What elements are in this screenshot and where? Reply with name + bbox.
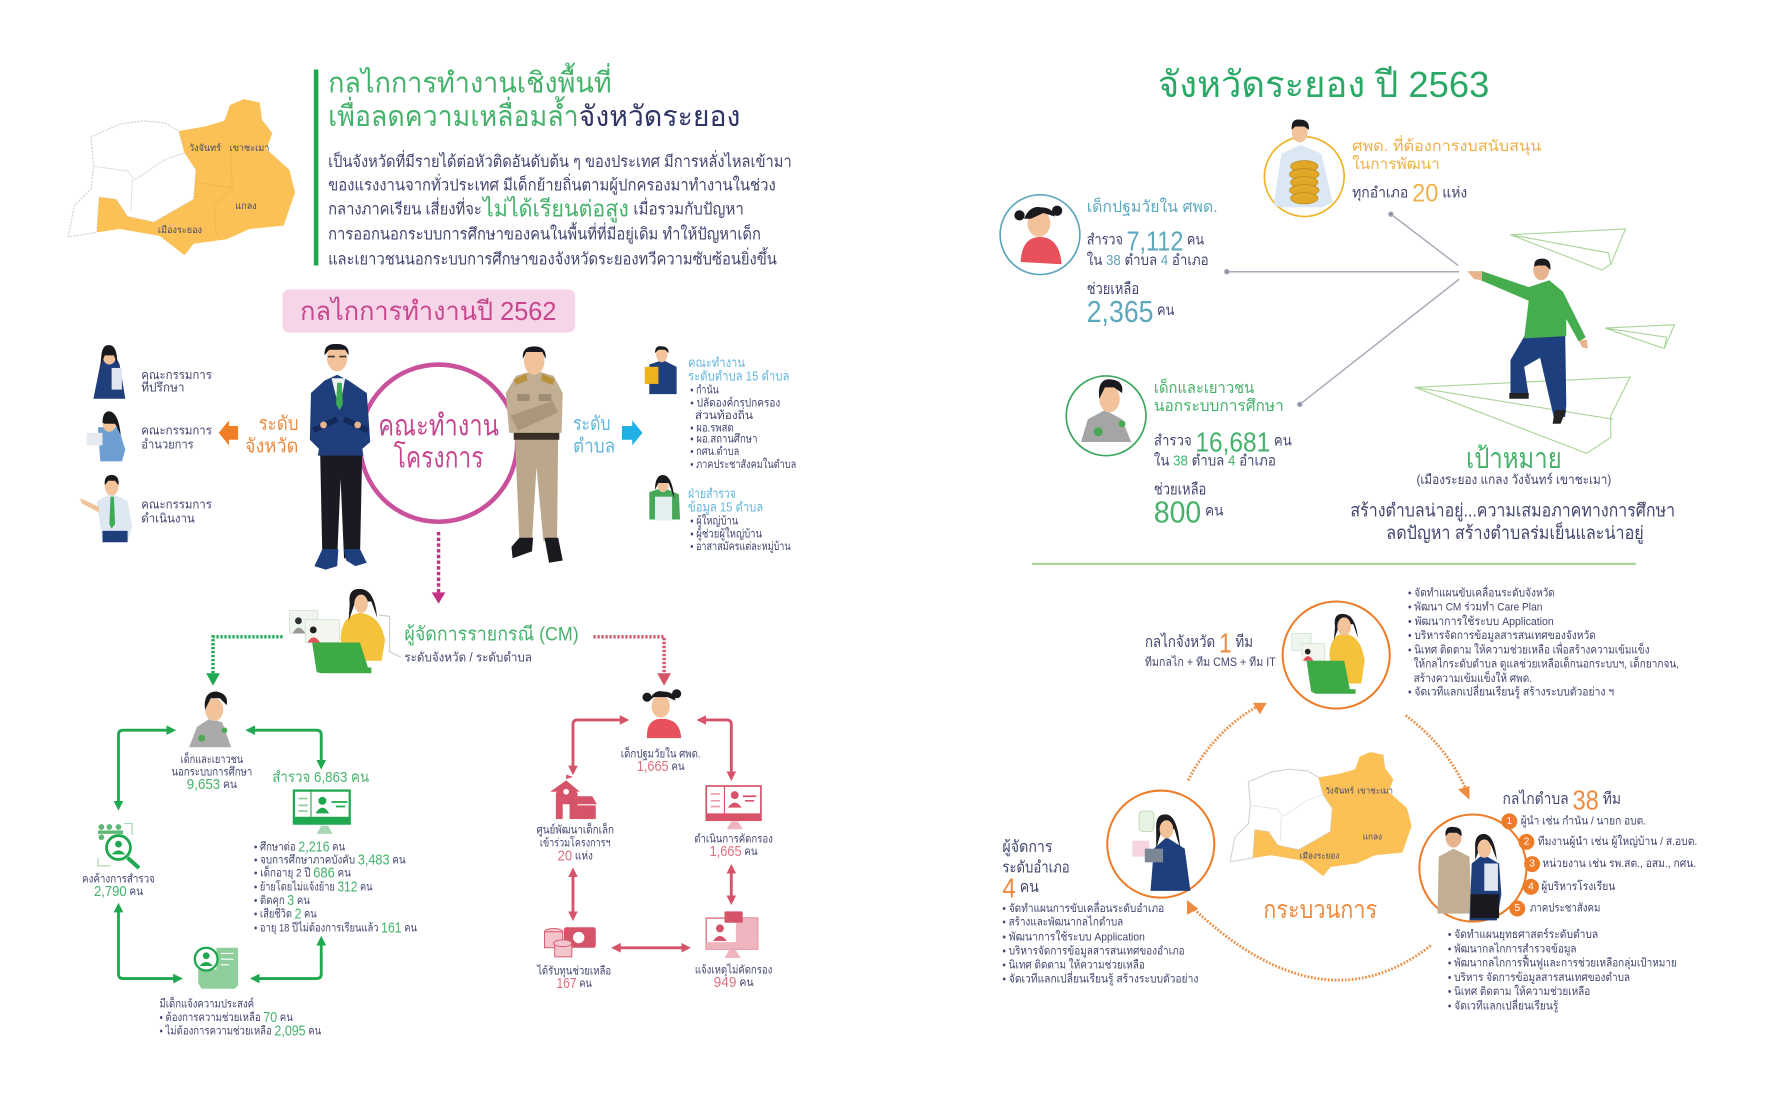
heading pill: mechanism 2562 (283, 289, 575, 333)
committee: directors (87, 411, 212, 461)
provincial mechanism: กลไกจังหวัด 1 ทีม (1145, 627, 1253, 658)
provincial mechanism: • พัฒนา CM ร่วมทำ Care Plan (1408, 601, 1542, 614)
green cycle arrows (118, 730, 321, 979)
survey breakdown list: • ย้ายโดยไม่แจ้งย้าย 312 คน (254, 879, 373, 895)
survey breakdown list: • ติดคุก 3 คน (254, 893, 310, 909)
sub-district working group (645, 346, 796, 471)
sub-district mechanism: • นิเทศ ติดตาม ให้ความช่วยเหลือ (1448, 985, 1590, 998)
card: centres needing support: ทุกอำเภอ 20 แห่ง (1352, 180, 1467, 208)
scholarship node with money icon: ได้รับทุนช่วยเหลือ (536, 965, 611, 978)
out-of-school youth node: 9,653 คน (187, 777, 237, 793)
provincial mechanism: ทีมกลไก + ทีม CMS + ทีม IT (1145, 655, 1276, 669)
out-of-school youth node (171, 691, 252, 793)
card: out-of-school youth: นอกระบบการศึกษา (1154, 398, 1284, 415)
sub-district mechanism: ภาคประชาสังคม (1530, 902, 1600, 914)
map: process centre: วังจันทร์ (1325, 785, 1355, 795)
connector lines to target (1225, 212, 1459, 406)
intro paragraph: กลางภาคเรียน เสี่ยงที่จะ (328, 198, 482, 219)
sub-district mechanism (1419, 784, 1697, 1012)
left level label and arrow: ระดับ (259, 413, 298, 435)
figure: case manager at laptop (289, 589, 401, 673)
heading: process: กระบวนการ (1263, 896, 1377, 924)
screening node with monitor icon (694, 786, 773, 860)
title block with green bar: เพื่อลดความเหลื่อมล้ำ (328, 96, 579, 133)
provincial mechanism: • พัฒนาการใช้ระบบ Application (1408, 615, 1554, 628)
card: preschool children: 2,365 คน (1087, 294, 1174, 329)
preschool child node: เด็กปฐมวัยใน ศพด. (621, 746, 701, 761)
provincial mechanism: • บริหารจัดการข้อมูลสารสนเทศของจังหวัด (1408, 629, 1596, 642)
district mechanism: • จัดเวทีแลกเปลี่ยนเรียนรู้ สร้างระบบตัวอย่าง (1002, 971, 1198, 986)
survey count with monitor icon (272, 769, 369, 834)
survey breakdown list: • อายุ 18 ปีไม่ต้องการเรียนแล้ว 161 คน (254, 920, 417, 936)
non-screening report node with monitor icon (695, 911, 772, 991)
sub-district mechanism: ผู้บริหารโรงเรียน (1541, 879, 1615, 893)
map: process centre: แกลง (1363, 833, 1382, 842)
card: centres needing support: ในการพัฒนา (1352, 155, 1440, 173)
committee: advisers (93, 345, 212, 399)
out-of-school youth node: นอกระบบการศึกษา (171, 765, 252, 778)
intro paragraph: เป็นจังหวัดที่มีรายได้ต่อหัวติดอันดับต้น ๆ ของประเทศ มีการหลั่งไหลเข้ามา (328, 150, 792, 171)
sub-district mechanism: ทีมงานผู้นำ เช่น ผู้ใหญ่บ้าน / ส.อบต. (1538, 835, 1697, 848)
request node with document icon: • ต้องการความช่วยเหลือ 70 คน (159, 1010, 293, 1026)
district mechanism: ผู้จัดการ (1002, 839, 1053, 857)
survey breakdown list: • ศึกษาต่อ 2,216 คน (254, 840, 345, 856)
out-of-school youth node: เด็กและเยาวชน (181, 751, 243, 766)
intro paragraph: และเยาวชนนอกระบบการศึกษาของจังหวัดระยองทวีความซับซ้อนยิ่งขึ้น (328, 247, 777, 269)
figure: man launching plane (1467, 259, 1588, 424)
survey breakdown list (254, 840, 417, 936)
sub-district working group: • ภาคประชาสังคมในตำบล (690, 458, 796, 471)
screening node with monitor icon: ดำเนินการคัดกรอง (694, 833, 773, 846)
committee: operations (80, 475, 212, 542)
dotted arrows from case manager (206, 637, 671, 686)
goal text: (เมืองระยอง แกลง วังจันทร์ เขาชะเมา) (1416, 472, 1611, 487)
sub-district mechanism: 4 (1528, 881, 1534, 892)
committee: advisers: ที่ปรึกษา (141, 378, 185, 394)
committee: advisers: คณะกรรมการ (141, 368, 212, 382)
right level label and arrow: ตำบล (573, 436, 615, 458)
district mechanism: • จัดทำแผนการขับเคลื่อนระดับอำเภอ (1002, 900, 1164, 915)
card: preschool children: สำรวจ 7,112 คน (1087, 225, 1204, 256)
goal text (1350, 443, 1675, 544)
survey team: • อาสาสมัครแต่ละหมู่บ้าน (690, 540, 791, 553)
intro paragraph: ไม่ได้เรียนต่อสูง (481, 195, 629, 222)
survey team: • ผู้ใหญ่บ้าน (690, 515, 738, 528)
pending survey node with magnifier icon: 2,790 คน (94, 884, 143, 900)
card: out-of-school youth: สำรวจ 16,681 คน (1154, 426, 1292, 457)
sub-district working group: • กศน.ตำบล (690, 445, 739, 458)
request node with document icon: • ไม่ต้องการความช่วยเหลือ 2,095 คน (159, 1023, 321, 1039)
card: preschool children: ใน 38 ตำบล 4 อำเภอ (1087, 251, 1209, 269)
sub-district working group: • ผอ.สถานศึกษา (690, 433, 758, 446)
provincial mechanism: • นิเทศ ติดตาม ให้ความช่วยเหลือ เพื่อสร้างความเข้มแข็ง (1408, 641, 1649, 656)
child development centre node (537, 775, 614, 865)
request node with document icon: มีเด็กแจ้งความประสงค์ (159, 996, 254, 1011)
sub-district working group: คณะทำงาน (688, 355, 745, 370)
card: out-of-school youth: 800 คน (1154, 494, 1223, 529)
district mechanism: • นิเทศ ติดตาม ให้ความช่วยเหลือ (1002, 958, 1145, 971)
preschool child node: 1,665 คน (637, 759, 685, 775)
intro paragraph: ของแรงงานจากทั่วประเทศ มีเด็กย้ายถิ่นตามผู้ปกครองมาทำงานในช่วง (328, 174, 776, 196)
card: out-of-school youth: ช่วยเหลือ (1154, 480, 1206, 498)
provincial mechanism: สร้างความเข้มแข็งให้ ศพด. (1414, 670, 1532, 685)
card: preschool children: ช่วยเหลือ (1087, 280, 1139, 298)
sub-district mechanism: ผู้นำ เช่น กำนัน / นายก อบต. (1521, 814, 1646, 827)
child development centre node: เข้าร่วมโครงการฯ (540, 836, 611, 850)
sub-district working group: • ผอ.รพสต (690, 422, 734, 434)
provincial mechanism: • จัดเวทีแลกเปลี่ยนเรียนรู้ สร้างระบบตัวอย่าง ฯ (1408, 684, 1614, 699)
sub-district working group: • กำนัน (690, 384, 719, 397)
provincial mechanism (1145, 585, 1679, 709)
left level label and arrow (219, 413, 298, 458)
survey breakdown list: • เด็กอายุ 2 ปี 686 คน (254, 865, 351, 882)
survey team: • ผู้ช่วยผู้ใหญ่บ้าน (690, 527, 762, 540)
card: preschool children (1000, 195, 1218, 329)
sub-district mechanism: 3 (1529, 859, 1535, 870)
sub-district mechanism: • จัดเวทีแลกเปลี่ยนเรียนรู้ (1448, 997, 1558, 1012)
non-screening report node with monitor icon: แจ้งเหตุไม่คัดกรอง (695, 964, 772, 977)
card: preschool children: เด็กปฐมวัยใน ศพด. (1087, 196, 1218, 216)
preschool child node (621, 689, 701, 775)
card: out-of-school youth (1066, 376, 1292, 529)
left level label and arrow: จังหวัด (245, 436, 298, 458)
map: process centre (1230, 752, 1412, 876)
map: process centre: เมืองระยอง (1300, 852, 1339, 861)
sub-district mechanism: • จัดทำแผนยุทธศาสตร์ระดับตำบล (1448, 927, 1598, 941)
survey breakdown list: • จบการศึกษาภาคบังคับ 3,483 คน (254, 853, 406, 869)
map: Rayong province: วังจันทร์ (189, 142, 221, 153)
goal text: เป้าหมาย (1466, 443, 1562, 475)
committee: operations: ดำเนินงาน (141, 511, 195, 525)
title block with green bar: กลไกการทำงานเชิงพื้นที่ (328, 63, 612, 100)
card: centres needing support (1264, 120, 1542, 216)
intro paragraph: การออกนอกระบบการศึกษาของคนในพื้นที่ที่มีอยู่เดิม ทำให้ปัญหาเด็ก (328, 222, 761, 245)
map: Rayong province: เขาชะเมา (230, 143, 269, 153)
figure: man in blue suit (310, 344, 370, 570)
district mechanism: • สร้างและพัฒนากลไกตำบล (1002, 916, 1123, 929)
intro paragraph (328, 150, 792, 269)
heading pill: mechanism 2562: กลไกการทำงานปี 2562 (300, 296, 556, 326)
survey breakdown list: • เสียชีวิต 2 คน (254, 907, 317, 923)
title block with green bar (314, 63, 740, 265)
card: out-of-school youth: ใน 38 ตำบล 4 อำเภอ (1154, 451, 1276, 469)
goal text: สร้างตำบลน่าอยู่...ความเสมอภาคทางการศึกษา (1350, 500, 1675, 521)
case manager heading: ผู้จัดการรายกรณี (CM) (404, 624, 579, 646)
sub-district working group: • ปลัดองค์กรปกครอง (690, 395, 780, 409)
sub-district mechanism: • บริหาร จัดการข้อมูลสารสนเทศของตำบล (1448, 971, 1630, 984)
case manager heading: ระดับจังหวัด / ระดับตำบล (404, 650, 532, 664)
map: Rayong province: เมืองระยอง (158, 225, 202, 235)
case manager heading (404, 624, 579, 664)
committee: directors: อำนวยการ (141, 437, 194, 451)
child development centre node: 20 แห่ง (558, 849, 593, 865)
survey team: ฝ่ายสำรวจ (688, 486, 736, 501)
pending survey node with magnifier icon: คงค้างการสำรวจ (82, 872, 155, 885)
child development centre node: ศูนย์พัฒนาเด็กเล็ก (537, 821, 614, 836)
working-group circle: โครงการ (394, 440, 484, 474)
sub-district working group: ส่วนท้องถิ่น (695, 407, 753, 422)
sub-district mechanism: • พัฒนากลไกการสำรวจข้อมูล (1448, 942, 1577, 955)
district mechanism: • พัฒนาการใช้ระบบ Application (1002, 931, 1145, 944)
working-group circle (360, 365, 517, 522)
sub-district working group: ระดับตำบล 15 ตำบล (688, 368, 789, 383)
goal text: ลดปัญหา สร้างตำบลร่มเย็นและน่าอยู่ (1386, 521, 1644, 544)
map: Rayong province (68, 99, 295, 255)
title block with green bar: จังหวัดระยอง (579, 101, 740, 133)
process cycle dotted arrows (1187, 703, 1469, 980)
survey team (649, 475, 791, 553)
sub-district mechanism: หน่วยงาน เช่น รพ.สต., อสม., กศน. (1542, 858, 1696, 870)
sub-district mechanism: • พัฒนากลไกการฟื้นฟูและการช่วยเหลือกลุ่มเป้าหมาย (1448, 955, 1677, 970)
scholarship node with money icon (536, 927, 611, 992)
card: centres needing support: ศพด. ที่ต้องการงบสนับสนุน (1352, 135, 1542, 156)
pending survey node with magnifier icon (82, 824, 155, 900)
map: process centre: เขาชะเมา (1357, 786, 1393, 795)
district mechanism: ระดับอำเภอ (1002, 860, 1070, 877)
sub-district mechanism: 2 (1524, 836, 1530, 847)
paper planes (1415, 229, 1675, 453)
district mechanism: 4 คน (1002, 872, 1039, 903)
survey team: ข้อมูล 15 ตำบล (688, 499, 763, 515)
panel: out-of-school youth cycle (82, 691, 417, 1039)
panel: preschool children cycle (536, 689, 773, 992)
working-group circle: คณะทำงาน (378, 410, 499, 443)
red cycle arrows (573, 720, 731, 948)
non-screening report node with monitor icon: 949 คน (714, 975, 754, 991)
right level label and arrow (573, 413, 642, 458)
committee: directors: คณะกรรมการ (141, 424, 212, 438)
district mechanism (1002, 791, 1214, 986)
provincial mechanism: ให้กลไกระดับตำบล ดูแลช่วยเหลือเด็กนอกระบบฯ, เด็กยากจน, (1414, 656, 1679, 671)
figure: officer in khaki uniform (506, 346, 563, 563)
sub-district mechanism: 5 (1514, 903, 1520, 914)
sub-district mechanism: 1 (1506, 816, 1512, 827)
right page title: จังหวัดระยอง ปี 2563 (1158, 64, 1489, 105)
survey count with monitor icon: สำรวจ 6,863 คน (272, 769, 369, 786)
committee: operations: คณะกรรมการ (141, 498, 212, 512)
request node with document icon (159, 948, 321, 1039)
right level label and arrow: ระดับ (573, 413, 611, 435)
card: out-of-school youth: เด็กและเยาวชน (1154, 377, 1254, 397)
provincial mechanism: • จัดทำแผนขับเคลื่อนระดับจังหวัด (1408, 585, 1555, 600)
map: Rayong province: แกลง (235, 201, 257, 211)
arrow: working group to case manager (432, 532, 445, 604)
scholarship node with money icon: 167 คน (556, 976, 592, 992)
district mechanism: • บริหารจัดการข้อมูลสารสนเทศของอำเภอ (1002, 945, 1185, 958)
screening node with monitor icon: 1,665 คน (710, 844, 758, 860)
sub-district mechanism: กลไกตำบล 38 ทีม (1502, 784, 1621, 815)
intro paragraph: เมื่อรวมกับปัญหา (633, 198, 744, 219)
